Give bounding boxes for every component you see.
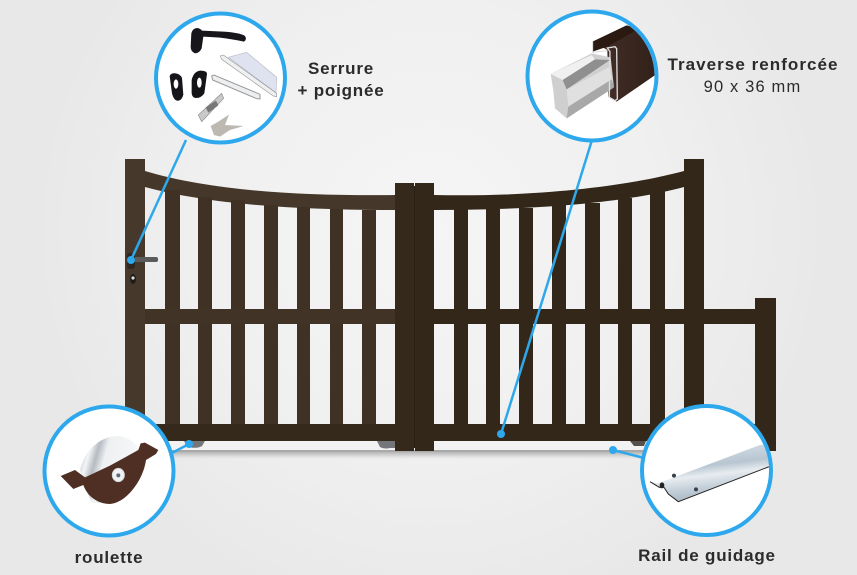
label: dimensions: 90 x 36 mm <box>704 78 801 96</box>
handle and lock cylinder <box>127 253 158 284</box>
icon: wheel <box>61 436 158 504</box>
right leaf <box>434 159 704 451</box>
label: roulette: roulette <box>75 548 143 567</box>
callout: serrure + poignee <box>156 14 285 142</box>
connector: rail <box>609 446 644 458</box>
gate <box>125 159 776 451</box>
ground shadow and rail <box>145 441 755 460</box>
icon: reinforced profile <box>551 25 660 118</box>
callout: rail de guidage <box>642 406 773 535</box>
callout: roulette <box>44 406 174 536</box>
fixed side panel <box>704 298 776 451</box>
center posts <box>395 183 434 451</box>
icon: guide rail <box>650 443 773 502</box>
icon: lock parts <box>170 28 277 137</box>
label: Traverse renforcee: Traverse renforcée <box>667 55 839 74</box>
left leaf <box>125 159 395 451</box>
connector: traverse <box>497 140 592 438</box>
label: + poignee: + poignée <box>297 81 385 100</box>
label: Serrure: Serrure <box>308 59 374 78</box>
connector: serrure <box>127 140 186 264</box>
rollers <box>184 441 646 448</box>
label: Rail de guidage: Rail de guidage <box>638 546 776 565</box>
connector: roulette <box>170 440 193 454</box>
callout: traverse renforcee <box>528 12 660 140</box>
